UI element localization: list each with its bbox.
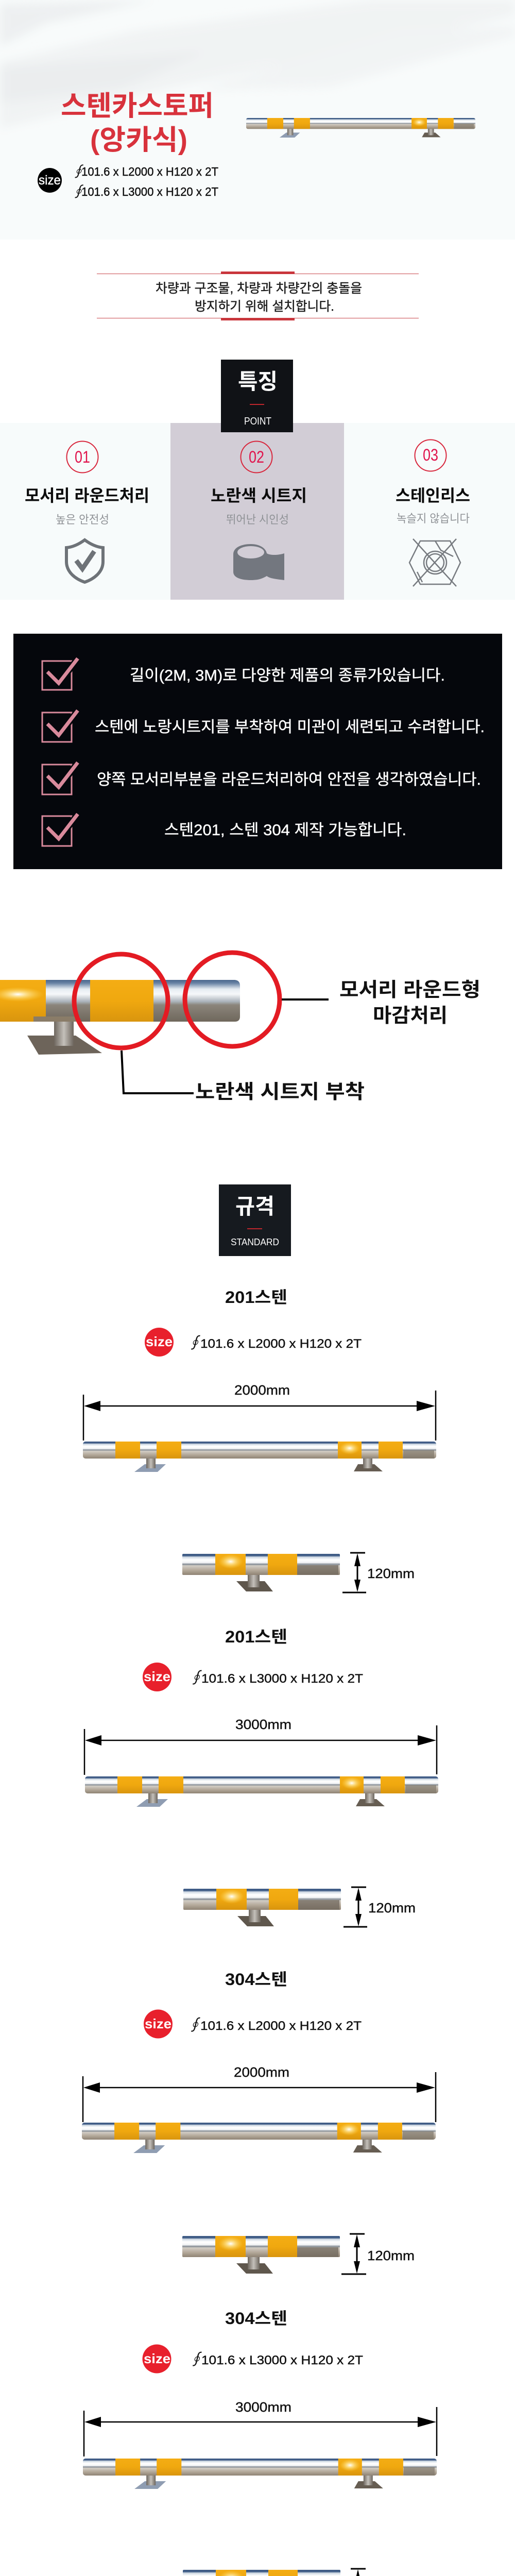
detail diagram xyxy=(0,953,480,1103)
size row: size xyxy=(145,2016,171,2031)
spec: 304 stainless 2000mm xyxy=(82,1970,436,2274)
size row: 101.6 x L2000 x H120 x 2T xyxy=(200,1337,362,1351)
height dimension: 120mm xyxy=(368,1900,416,1916)
icon: shield with check xyxy=(66,540,103,582)
title: 스텐카스토퍼 xyxy=(61,91,214,122)
length dimension: 2000mm xyxy=(234,1382,290,1398)
check item 1 xyxy=(42,658,445,690)
feature 02: 노란색 시트지 xyxy=(211,486,307,505)
side view xyxy=(182,2236,340,2274)
icon: rust-free nut xyxy=(409,539,460,586)
callout: yellow sheet: 노란색 시트지 부착 xyxy=(195,1081,365,1103)
callout rings xyxy=(74,953,280,1048)
length dimension: 3000mm xyxy=(235,2399,291,2415)
callout: rounded edge xyxy=(282,979,480,1027)
size row: ∮ xyxy=(188,1670,203,1687)
heading badge: features xyxy=(221,360,293,432)
spec: 201 stainless 3000mm: 201스텐 xyxy=(225,1628,287,1646)
length dimension xyxy=(84,1717,437,1775)
intro statement: 방지하기 위해 설치합니다. xyxy=(195,299,334,314)
size row: 101.6 x L3000 x H120 x 2T xyxy=(201,2353,363,2367)
size row xyxy=(145,1328,362,1357)
size row xyxy=(142,2344,363,2373)
feature 01: 모서리 라운드처리 xyxy=(25,486,149,505)
callout: yellow sheet xyxy=(122,1050,365,1103)
spec: 304 stainless 3000mm: 304스텐 xyxy=(225,2309,287,2328)
check item 2 xyxy=(42,710,485,742)
check item 4 xyxy=(42,814,406,846)
spec: 304 stainless 2000mm: 304스텐 xyxy=(225,1970,287,1989)
height dimension: 120mm xyxy=(367,2248,415,2263)
callout: rounded edge: 마감처리 xyxy=(373,1005,448,1027)
spec: 201 stainless 2000mm xyxy=(83,1288,436,1592)
panel: features xyxy=(0,423,515,600)
size specifications: ∮ xyxy=(71,184,85,200)
length dimension xyxy=(84,2399,437,2456)
size badge xyxy=(38,168,62,193)
intro statement: 차량과 구조물, 차량과 차량간의 충돌을 xyxy=(156,281,362,296)
length dimension xyxy=(83,1382,436,1440)
height dimension xyxy=(342,1553,415,1592)
side view xyxy=(183,2570,340,2576)
feature 01 xyxy=(0,423,170,600)
check item 4: 스텐201, 스텐 304 제작 가능합니다. xyxy=(164,822,406,839)
product photo: bar xyxy=(246,118,475,138)
length dimension: 2000mm xyxy=(234,2064,289,2080)
heading badge: standard: STANDARD xyxy=(231,1237,279,1247)
feature 03: 녹슬지 않습니다 xyxy=(397,512,470,525)
length dimension xyxy=(83,2064,436,2122)
title: (앙카식) xyxy=(90,125,187,156)
heading badge: standard: 규격 xyxy=(235,1194,274,1218)
spec: 304 stainless 3000mm xyxy=(83,2309,437,2576)
size specifications: 101.6 x L3000 x H120 x 2T xyxy=(81,185,218,198)
size row: ∮ xyxy=(186,2017,202,2034)
feature 02 xyxy=(170,423,344,600)
feature 03 xyxy=(344,423,515,600)
size row: 101.6 x L2000 x H120 x 2T xyxy=(200,2019,362,2033)
feature 03: 스테인리스 xyxy=(396,486,470,505)
side view xyxy=(182,1554,340,1591)
feature 03: 03 xyxy=(423,446,438,464)
title xyxy=(61,91,214,156)
size row xyxy=(143,1663,363,1691)
size row: 101.6 x L3000 x H120 x 2T xyxy=(201,1672,363,1686)
spec: 201 stainless 2000mm: 201스텐 xyxy=(225,1288,287,1307)
product bar xyxy=(82,2123,436,2153)
height dimension xyxy=(344,1887,416,1927)
size row: size xyxy=(144,2351,170,2366)
length dimension: 3000mm xyxy=(235,1717,291,1732)
size row: ∮ xyxy=(186,1335,202,1352)
spec: 201 stainless 3000mm xyxy=(84,1628,438,1927)
size row: ∮ xyxy=(188,2351,203,2368)
check item 3 xyxy=(42,762,481,794)
heading badge: features: 특징 xyxy=(238,369,278,394)
height dimension xyxy=(341,2234,415,2274)
size badge: size xyxy=(39,173,61,188)
product bar xyxy=(83,1442,436,1472)
check item 3: 양쪽 모서리부분을 라운드처리하여 안전을 생각하였습니다. xyxy=(97,771,481,788)
feature 02: 뛰어난 시인성 xyxy=(226,513,289,526)
heading badge: standard xyxy=(219,1184,291,1256)
height dimension xyxy=(343,2569,415,2576)
height dimension: 120mm xyxy=(367,1566,415,1581)
panel: checklist xyxy=(13,634,502,869)
size row: size xyxy=(146,1334,173,1349)
check item 2: 스텐에 노랑시트지를 부착하여 미관이 세련되고 수려합니다. xyxy=(95,719,485,736)
feature 01: 01 xyxy=(75,448,90,466)
size specifications: 101.6 x L2000 x H120 x 2T xyxy=(81,165,218,178)
side view xyxy=(183,1889,341,1926)
size specifications xyxy=(71,164,218,200)
check item 1: 길이(2M, 3M)로 다양한 제품의 종류가있습니다. xyxy=(130,667,445,684)
size row xyxy=(144,2009,362,2038)
heading badge: features: POINT xyxy=(244,416,271,427)
intro statement xyxy=(97,272,419,320)
size specifications: ∮ xyxy=(71,164,85,180)
product close-up xyxy=(0,980,240,1055)
feature 01: 높은 안전성 xyxy=(56,513,109,526)
size row: size xyxy=(144,1669,170,1684)
feature 02: 02 xyxy=(249,448,264,466)
callout: rounded edge: 모서리 라운드형 xyxy=(339,979,480,1001)
product bar xyxy=(83,2459,437,2489)
icon: tape roll xyxy=(233,544,284,580)
product bar xyxy=(85,1776,438,1807)
panel: hero xyxy=(0,0,515,240)
